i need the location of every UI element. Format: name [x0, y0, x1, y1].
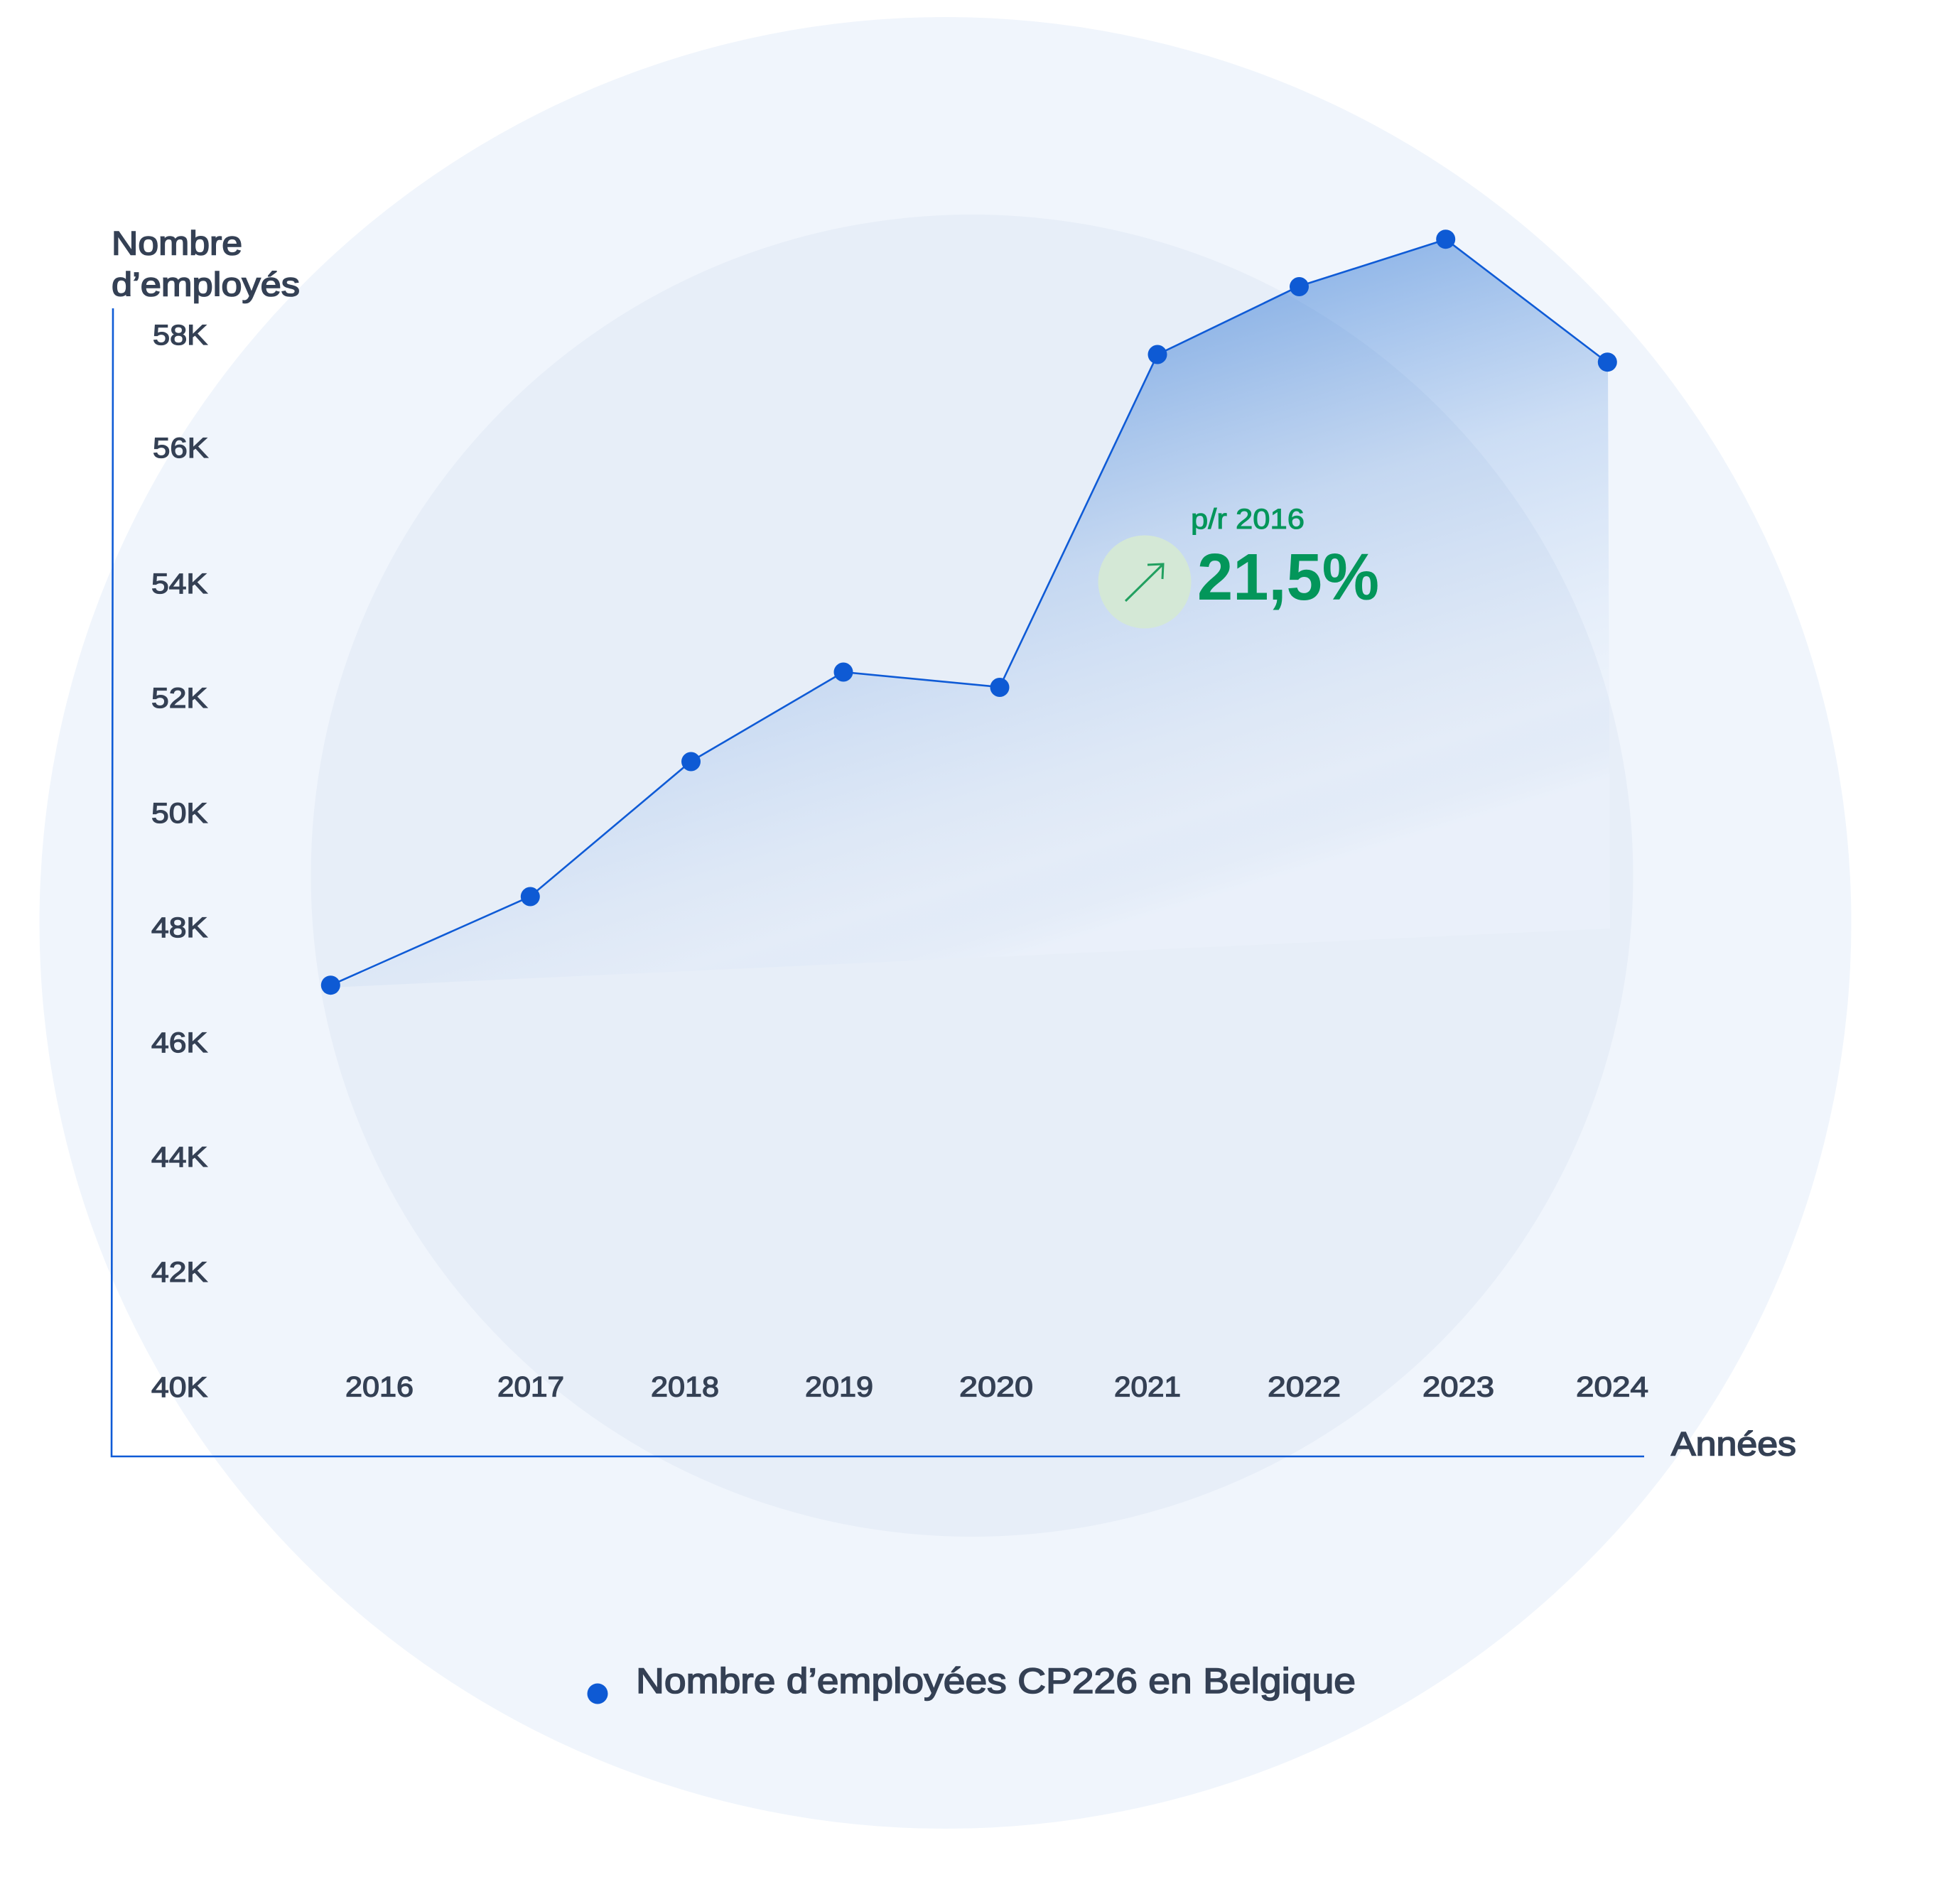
y-axis title: Nombre	[112, 225, 242, 261]
y-axis title: d’employés	[112, 266, 300, 303]
callout value: 21,5%	[1197, 540, 1379, 614]
x-axis labels: 2017	[497, 1371, 564, 1402]
callout caption: p/r 2016	[1191, 504, 1305, 535]
x-axis labels	[345, 1371, 1648, 1402]
data points	[321, 229, 1617, 995]
y-axis labels: 54K	[151, 568, 207, 600]
callout: growth versus 2016	[1098, 504, 1379, 628]
axes	[112, 308, 1644, 1456]
y-axis labels: 42K	[151, 1257, 207, 1288]
x-axis labels: 2023	[1422, 1371, 1494, 1402]
y-axis labels	[151, 320, 208, 1403]
x-axis labels: 2020	[959, 1371, 1033, 1402]
y-axis labels: 46K	[151, 1027, 207, 1059]
x-axis labels: 2016	[345, 1371, 414, 1402]
data line	[330, 239, 1607, 985]
legend: Nombre d’employées CP226 en Belgique	[636, 1661, 1356, 1701]
x-axis title: Années	[1671, 1425, 1796, 1462]
x-axis labels: 2021	[1114, 1371, 1181, 1402]
x-axis labels: 2024	[1576, 1371, 1648, 1402]
y-axis labels: 40K	[151, 1372, 207, 1403]
inner background circle	[311, 215, 1633, 1537]
area under the line	[330, 239, 1610, 988]
icon: green circle with up arrow	[1098, 536, 1191, 628]
y-axis labels: 44K	[151, 1142, 207, 1173]
y-axis labels: 50K	[151, 798, 207, 829]
y-axis labels: 58K	[153, 320, 207, 351]
x-axis labels: 2019	[805, 1371, 873, 1402]
x-axis labels: 2018	[651, 1371, 719, 1402]
x-axis labels: 2022	[1268, 1371, 1341, 1402]
y-axis title	[112, 225, 300, 303]
y-axis labels: 48K	[151, 912, 207, 943]
y-axis labels: 56K	[153, 433, 208, 464]
y-axis labels: 52K	[151, 683, 207, 714]
